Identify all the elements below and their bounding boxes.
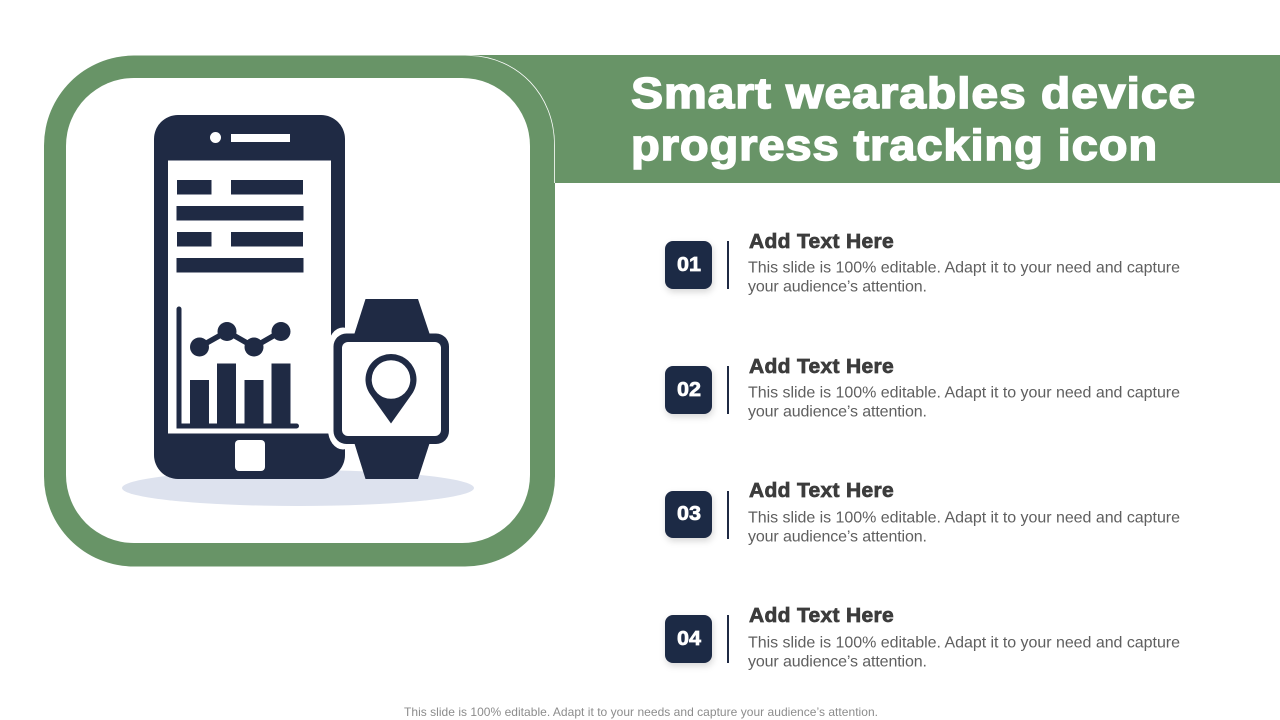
title: Smart wearables device [631, 69, 1196, 118]
number badge [665, 241, 712, 289]
item body: your audience’s attention. [748, 404, 927, 420]
item body [748, 260, 1180, 296]
item body: This slide is 100% editable. Adapt it to your need and capture [748, 634, 1180, 652]
item body [748, 384, 1180, 420]
icon: location pin [366, 354, 416, 424]
item heading: Add Text Here [749, 605, 894, 627]
item body [748, 510, 1180, 546]
icon: smartwatch [328, 299, 449, 479]
rounded image panel [44, 56, 555, 566]
item heading: Add Text Here [749, 480, 894, 502]
item body [748, 634, 1180, 670]
item body: your audience’s attention. [748, 654, 927, 670]
item 02 [665, 356, 1180, 420]
item body: This slide is 100% editable. Adapt it to your need and capture [748, 510, 1180, 526]
footer note: This slide is 100% editable. Adapt it to your needs and capture your audience’s attention. [404, 705, 878, 719]
item body: your audience’s attention. [748, 278, 927, 296]
text lines [176, 180, 304, 272]
item 01 [665, 231, 1180, 296]
chart [176, 306, 299, 428]
number badge: 04 [677, 628, 702, 650]
title: progress tracking icon [631, 121, 1158, 170]
item body: your audience’s attention. [748, 528, 927, 546]
title banner [470, 55, 1280, 183]
number badge [665, 366, 712, 414]
title [631, 69, 1196, 170]
icon: phone [154, 115, 345, 479]
number badge [665, 615, 712, 663]
number badge: 02 [677, 379, 701, 401]
item 03 [665, 480, 1180, 546]
item body: This slide is 100% editable. Adapt it to your need and capture [748, 260, 1180, 276]
item 04 [665, 605, 1180, 670]
number badge: 01 [677, 254, 701, 276]
item heading: Add Text Here [749, 231, 894, 253]
item body: This slide is 100% editable. Adapt it to your need and capture [748, 384, 1180, 402]
icon: phone and smartwatch [122, 115, 474, 506]
number badge: 03 [677, 503, 701, 525]
item heading: Add Text Here [749, 356, 894, 378]
number badge [665, 491, 712, 538]
icon shadow [122, 470, 474, 506]
